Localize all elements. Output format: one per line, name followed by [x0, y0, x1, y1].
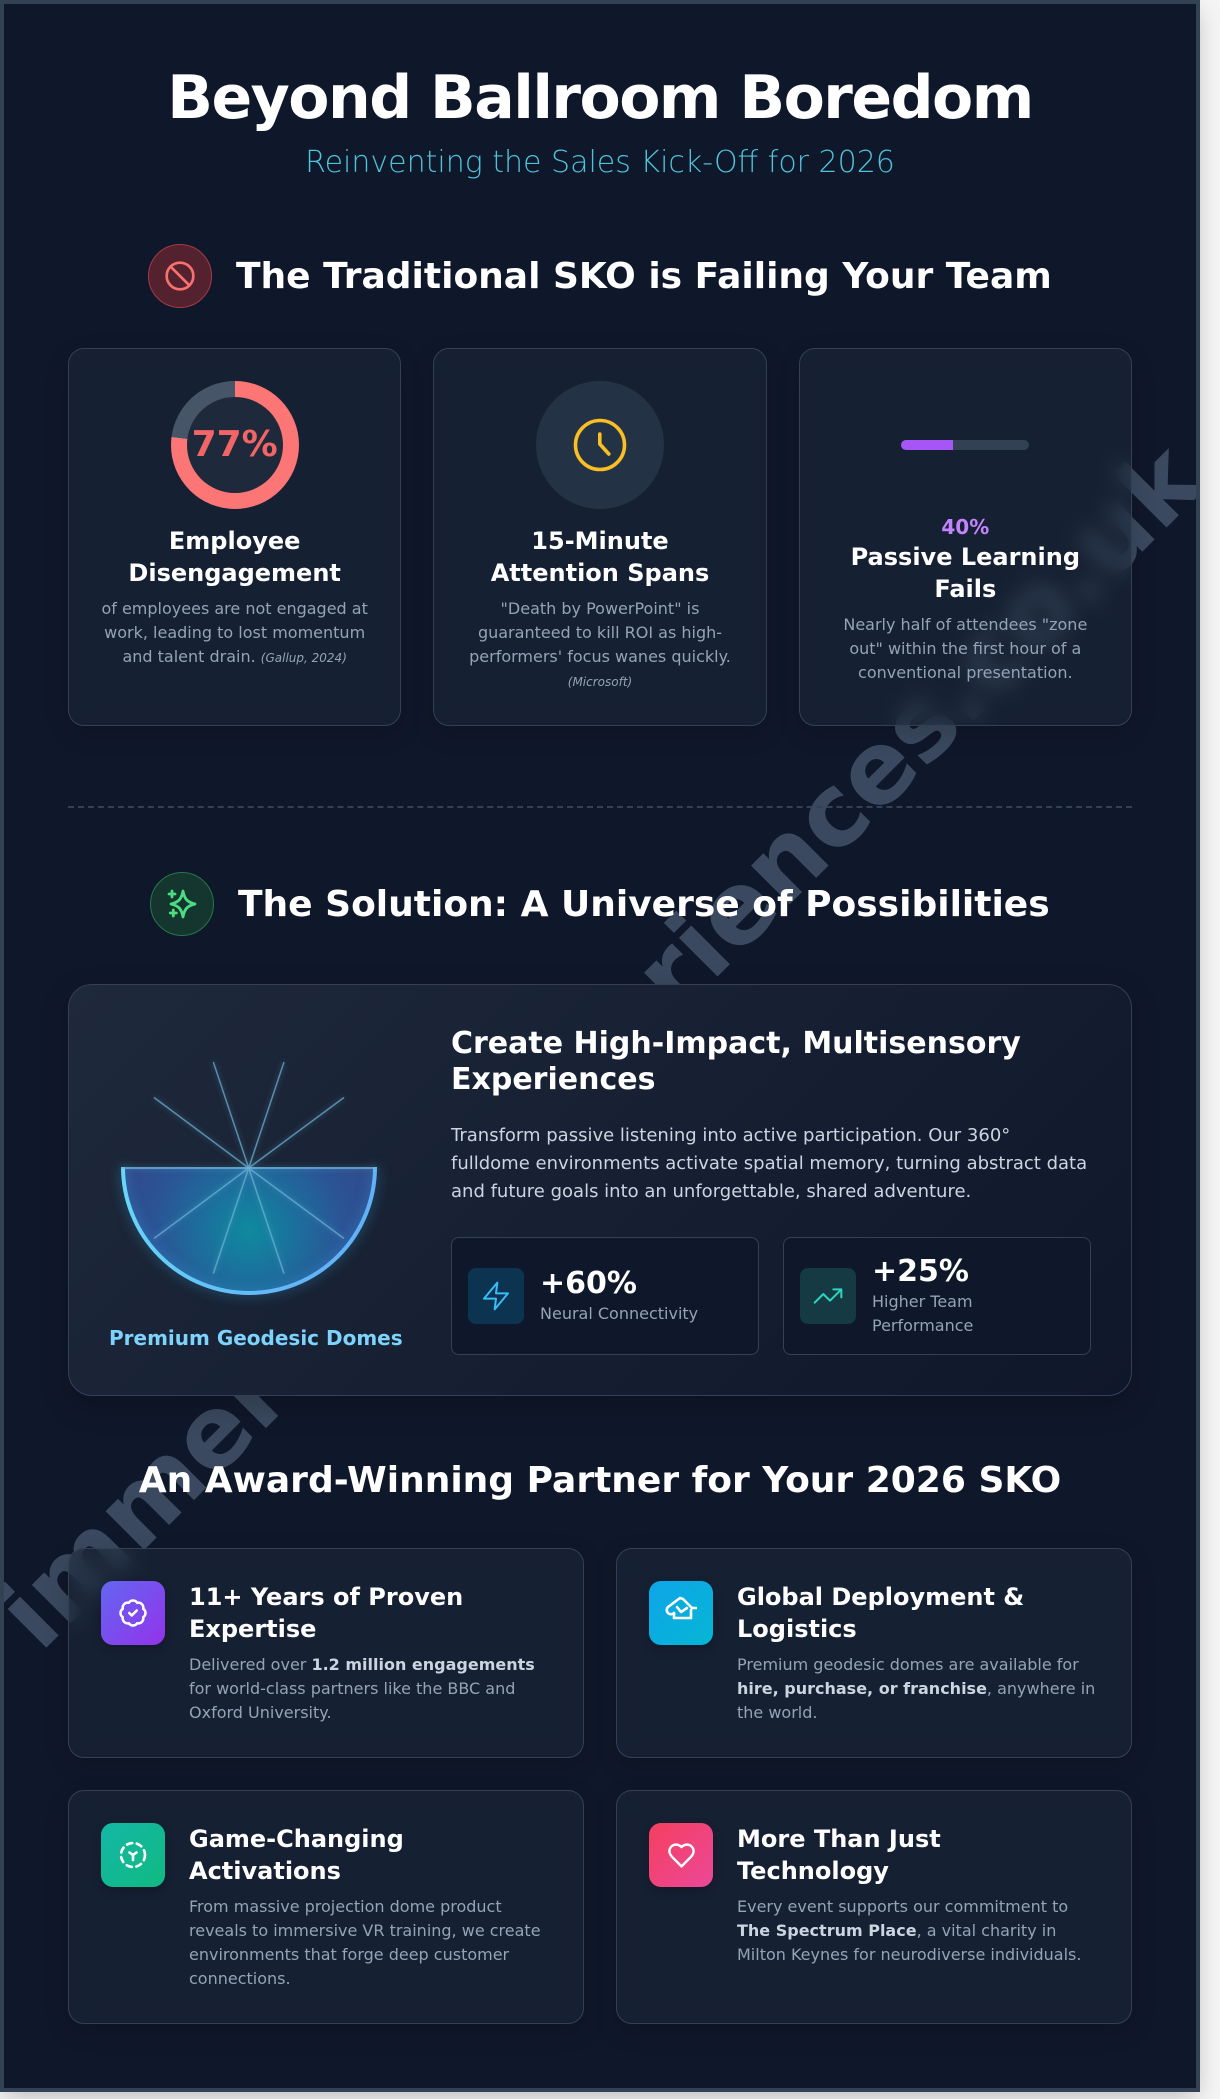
- title: Beyond Ballroom Boredom: [167, 63, 1033, 133]
- card heading: global deployment: Logistics: [737, 1615, 857, 1643]
- panel: multisensory experiences: [68, 984, 1132, 1396]
- icon: heart: [649, 1823, 713, 1887]
- panel: activations: [68, 1790, 584, 2024]
- icon: ban: [148, 244, 212, 308]
- icon: lightning: [468, 1268, 524, 1324]
- card text: global deployment: Premium geodesic domes are available for: [737, 1655, 1079, 1674]
- card heading: employee disengagement: [128, 527, 341, 587]
- card text: activations: From massive projection dome product: [189, 1897, 502, 1916]
- heading: problem section: The Traditional SKO is Failing Your Team: [236, 256, 1052, 297]
- icon: trending up: [800, 1268, 856, 1324]
- panel: charity: [616, 1790, 1132, 2024]
- card text: passive learning: [843, 615, 1087, 682]
- panel heading: multisensory: [451, 1026, 1021, 1097]
- card heading: expertise: [189, 1583, 463, 1643]
- stat label: team performance: Higher Team: [872, 1292, 973, 1311]
- card text: charity: Every event supports our commitment to: [737, 1897, 1068, 1916]
- card text: employee disengagement: and talent drain. (Gallup, 2024): [122, 647, 347, 666]
- icon: dashed cube: [101, 1823, 165, 1887]
- stat: +60%: +60%: [540, 1266, 637, 1301]
- card text: global deployment: [737, 1655, 1095, 1722]
- dome caption: Premium Geodesic Domes: [109, 1326, 403, 1350]
- illustration: geodesic dome: [115, 1062, 383, 1302]
- card text: activations: environments that forge deep customer: [189, 1945, 509, 1964]
- card heading: attention spans: [490, 527, 709, 587]
- heading: solution section: The Solution: A Universe of Possibilities: [238, 884, 1050, 925]
- card heading: employee disengagement: Employee: [169, 527, 300, 555]
- panel heading: multisensory: Create High-Impact, Multisensory: [451, 1026, 1021, 1061]
- card heading: charity: Technology: [737, 1857, 889, 1885]
- card text: employee disengagement: [101, 599, 368, 666]
- card text: activations: [189, 1897, 541, 1988]
- panel: expertise: [68, 1548, 584, 1758]
- card text: attention spans: "Death by PowerPoint" is: [501, 599, 699, 618]
- panel text: Transform passive listening into active participation. Our 360°: [451, 1125, 1010, 1146]
- donut chart: 77%: 77%: [192, 424, 278, 465]
- donut chart: 77%: [171, 381, 299, 509]
- icon: logistics: [649, 1581, 713, 1645]
- stat label: neural connectivity: Neural Connectivity: [540, 1304, 698, 1323]
- stat box: team performance: [783, 1237, 1091, 1355]
- stat: +25%: +25%: [872, 1254, 969, 1289]
- card heading: attention spans: Attention Spans: [491, 559, 709, 587]
- card text: passive learning: out" within the first hour of a: [849, 639, 1081, 658]
- card heading: passive learning: Passive Learning: [851, 543, 1080, 571]
- card text: expertise: [189, 1655, 535, 1722]
- subtitle: Reinventing the Sales Kick-Off for 2026: [305, 145, 895, 180]
- card text: employee disengagement: of employees are not engaged at: [101, 599, 368, 618]
- card text: passive learning: conventional presentation.: [858, 663, 1073, 682]
- card heading: expertise: Expertise: [189, 1615, 316, 1643]
- heading: partner section: An Award-Winning Partner for Your 2026 SKO: [139, 1460, 1061, 1501]
- panel text: [450, 1125, 1087, 1202]
- card text: attention spans: performers' focus wanes quickly.: [469, 647, 731, 666]
- panel text: and future goals into an unforgettable, shared adventure.: [451, 1181, 971, 1202]
- card heading: global deployment: [737, 1583, 1024, 1643]
- stat label: team performance: [872, 1292, 973, 1335]
- card heading: passive learning: [851, 543, 1080, 603]
- progress bar: 40%: [901, 440, 1029, 450]
- card heading: attention spans: 15-Minute: [531, 527, 669, 555]
- card text: expertise: Oxford University.: [189, 1703, 332, 1722]
- card text: global deployment: hire, purchase, or franchise, anywhere in: [737, 1679, 1095, 1698]
- panel: passive learning: [799, 348, 1132, 726]
- card text: global deployment: the world.: [737, 1703, 817, 1722]
- card heading: activations: Activations: [189, 1857, 341, 1885]
- card heading: employee disengagement: Disengagement: [128, 559, 341, 587]
- dashed divider: [68, 806, 1132, 808]
- card text: attention spans: [469, 599, 731, 689]
- panel: attention spans: [433, 348, 767, 726]
- icon: sparkles: [150, 872, 214, 936]
- card heading: global deployment: Global Deployment &: [737, 1583, 1024, 1611]
- stat box: neural connectivity: [451, 1237, 759, 1355]
- card text: expertise: for world-class partners like the BBC and: [189, 1679, 515, 1698]
- stat: 40%: 40%: [941, 515, 989, 539]
- panel heading: multisensory: Experiences: [451, 1062, 655, 1097]
- icon: badge check: [101, 1581, 165, 1645]
- card heading: passive learning: Fails: [934, 575, 996, 603]
- card heading: charity: [737, 1825, 941, 1885]
- card text: activations: reveals to immersive VR training, we create: [189, 1921, 541, 1940]
- icon: clock: [536, 381, 664, 509]
- card text: charity: Milton Keynes for neurodiverse individuals.: [737, 1945, 1081, 1964]
- panel: employee disengagement: [68, 348, 401, 726]
- card text: attention spans: (Microsoft): [568, 675, 632, 689]
- card text: passive learning: Nearly half of attendees "zone: [843, 615, 1087, 634]
- card heading: activations: Game-Changing: [189, 1825, 404, 1853]
- card text: employee disengagement: work, leading to lost momentum: [104, 623, 365, 642]
- card heading: activations: [189, 1825, 404, 1885]
- card text: activations: connections.: [189, 1969, 291, 1988]
- card heading: expertise: 11+ Years of Proven: [189, 1583, 463, 1611]
- stat label: team performance: Performance: [872, 1316, 973, 1335]
- card text: charity: [737, 1897, 1081, 1964]
- panel text: fulldome environments activate spatial memory, turning abstract data: [451, 1153, 1087, 1174]
- card text: expertise: Delivered over 1.2 million engagements: [189, 1655, 535, 1674]
- card heading: charity: More Than Just: [737, 1825, 941, 1853]
- card text: attention spans: guaranteed to kill ROI as high-: [478, 623, 722, 642]
- card text: charity: The Spectrum Place, a vital charity in: [737, 1921, 1056, 1940]
- panel: global deployment: [616, 1548, 1132, 1758]
